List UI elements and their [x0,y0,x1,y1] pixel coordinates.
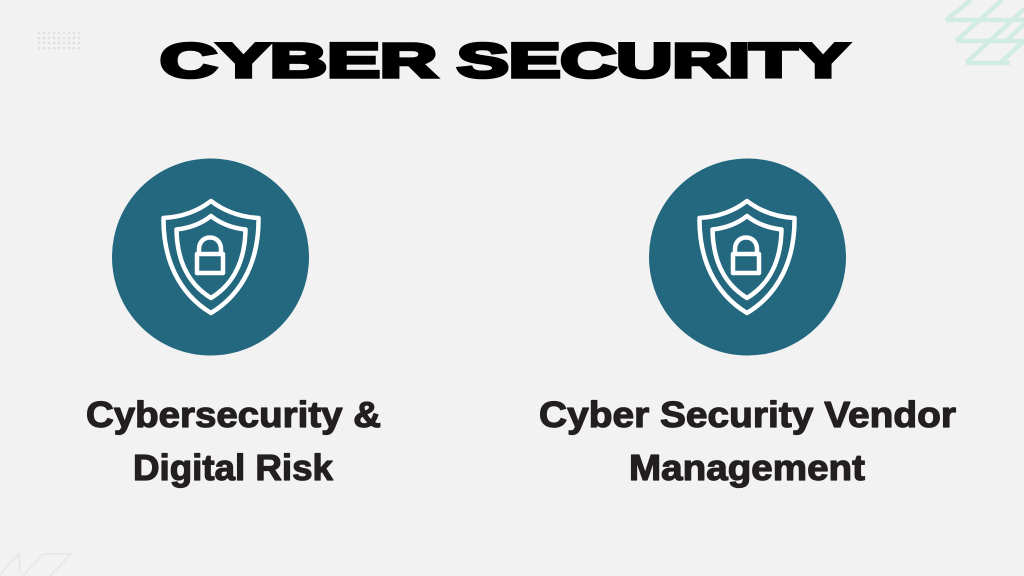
label: cyber security vendor management: Cyber Security Vendor [539,394,956,435]
decorative lines bottom left [0,553,71,576]
panel: cyber security vendor management [539,158,966,488]
title [160,35,849,88]
title: SECURITY [457,35,849,88]
panel: cybersecurity and digital risk [86,158,391,488]
label: cybersecurity and digital risk: Cybersecurity & [86,394,381,435]
decorative dot grid [38,32,80,49]
title: CYBER [160,35,437,88]
icon: shield with lock in teal circle [649,158,846,356]
decorative lattice top right [946,0,1024,63]
label: cyber security vendor management: Management [629,447,865,488]
icon: shield with lock in teal circle [112,158,309,356]
label: cybersecurity and digital risk: Digital Risk [133,447,334,488]
